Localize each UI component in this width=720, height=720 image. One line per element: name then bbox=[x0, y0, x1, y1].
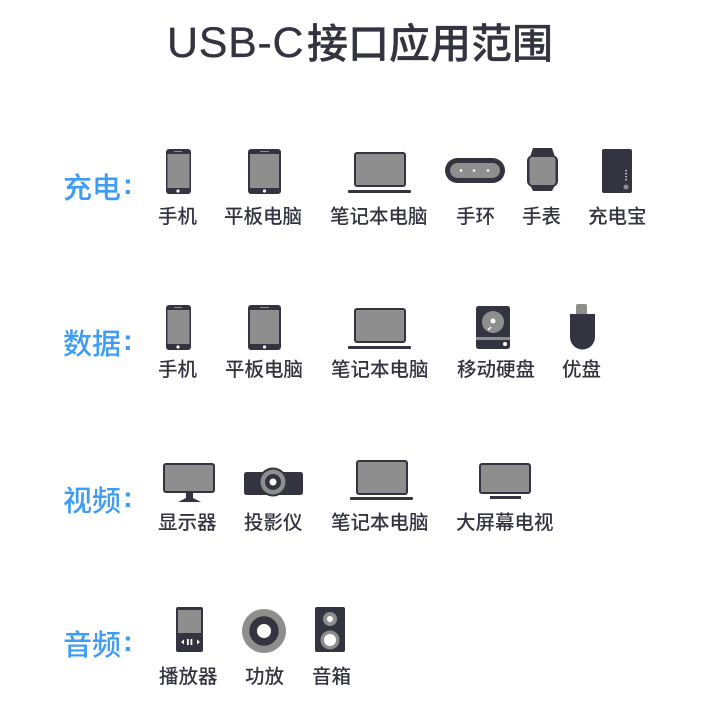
label: 优盘 bbox=[562, 358, 601, 381]
item: laptop bbox=[330, 152, 428, 228]
item: laptop bbox=[331, 460, 429, 534]
heading: video: 视频 bbox=[63, 485, 121, 518]
item: watch bbox=[522, 148, 561, 228]
icon: wristband bbox=[445, 158, 505, 183]
icon: projector bbox=[244, 468, 303, 496]
item: laptop bbox=[331, 308, 429, 381]
heading: data: 数据 bbox=[63, 328, 121, 361]
item: tablet bbox=[225, 305, 303, 381]
icon: phone bbox=[166, 149, 191, 194]
heading: charging: : bbox=[123, 169, 133, 201]
item: monitor bbox=[158, 463, 217, 534]
panel: charging bbox=[63, 148, 647, 228]
label: 平板电脑 bbox=[224, 206, 302, 228]
label: 音箱 bbox=[312, 666, 351, 688]
label: 笔记本电脑 bbox=[331, 359, 429, 381]
icon: tablet bbox=[248, 149, 281, 194]
item: portable hard disk bbox=[457, 306, 535, 381]
icon: laptop bbox=[350, 460, 413, 500]
label: 充电宝 bbox=[588, 205, 647, 228]
label: 平板电脑 bbox=[225, 359, 303, 381]
item: speaker bbox=[312, 607, 351, 688]
icon: USB drive bbox=[570, 304, 595, 350]
heading: data: : bbox=[123, 325, 133, 357]
item: USB drive bbox=[562, 304, 601, 381]
icon: amplifier bbox=[242, 609, 286, 653]
title bbox=[167, 19, 553, 67]
icon: player bbox=[176, 607, 203, 652]
title: USB-C bbox=[167, 19, 304, 67]
panel: audio bbox=[63, 607, 351, 688]
item: phone bbox=[158, 149, 198, 228]
item: wristband bbox=[445, 158, 505, 228]
label: 移动硬盘 bbox=[457, 358, 535, 381]
item: tablet bbox=[224, 149, 302, 228]
icon: monitor bbox=[163, 463, 215, 502]
icon: tablet bbox=[248, 305, 281, 350]
icon: laptop bbox=[348, 152, 411, 193]
label: 笔记本电脑 bbox=[331, 512, 429, 534]
icon: hard disk bbox=[476, 306, 510, 349]
label: 播放器 bbox=[159, 666, 218, 688]
label: 手表 bbox=[522, 206, 561, 228]
item: player bbox=[159, 607, 218, 688]
item: projector bbox=[244, 468, 303, 534]
label: 笔记本电脑 bbox=[330, 206, 428, 228]
icon: phone bbox=[166, 305, 191, 350]
label: 投影仪 bbox=[244, 512, 303, 534]
icon: power bank bbox=[602, 149, 632, 193]
item: amplifier bbox=[242, 609, 286, 688]
label: 手机 bbox=[158, 206, 198, 228]
heading: charging: 充电 bbox=[63, 172, 121, 205]
label: 手机 bbox=[158, 359, 198, 381]
item: large TV bbox=[456, 463, 554, 534]
icon: watch bbox=[527, 148, 558, 191]
label: 功放 bbox=[245, 666, 284, 688]
icon: speaker bbox=[315, 607, 345, 652]
item: phone bbox=[158, 305, 198, 381]
title: 接口应用范围 bbox=[307, 21, 553, 67]
panel: video bbox=[63, 460, 554, 534]
panel: data bbox=[63, 304, 601, 381]
icon: TV bbox=[479, 463, 531, 499]
label: 大屏幕电视 bbox=[456, 512, 554, 534]
heading: video: : bbox=[123, 482, 133, 514]
item: power bank bbox=[588, 149, 647, 228]
label: 显示器 bbox=[158, 512, 217, 534]
heading: audio: 音频 bbox=[63, 629, 121, 662]
heading: audio: : bbox=[123, 626, 133, 658]
icon: laptop bbox=[348, 308, 411, 349]
label: 手环 bbox=[456, 206, 495, 228]
